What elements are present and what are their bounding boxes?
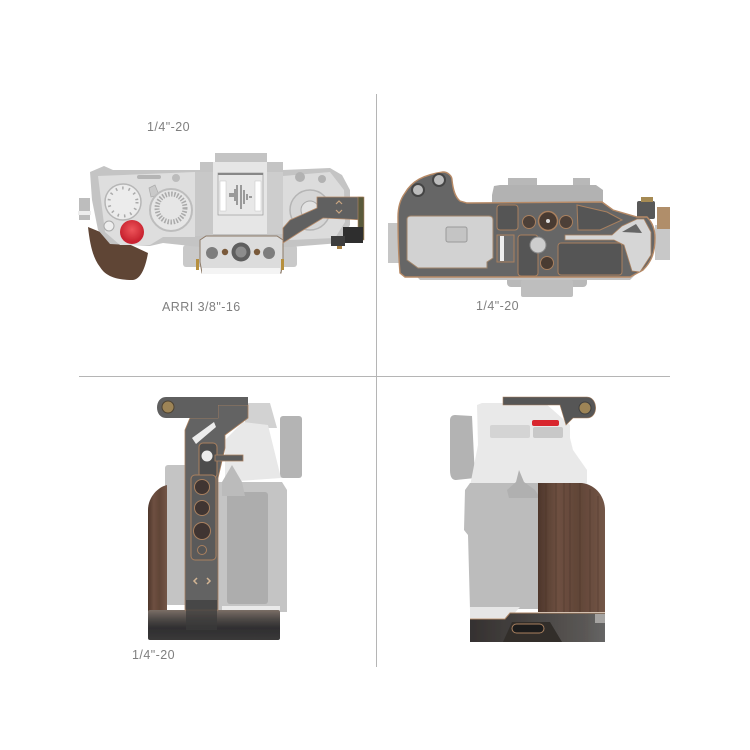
viewfinder eyecup xyxy=(450,415,475,480)
dials xyxy=(104,172,330,231)
red shutter button xyxy=(120,220,144,244)
panel: bottom view of cage xyxy=(388,172,670,297)
wood grip xyxy=(538,483,605,612)
camera top xyxy=(470,403,587,486)
light band xyxy=(470,607,520,618)
cage front plate xyxy=(196,236,284,274)
battery door xyxy=(407,216,493,268)
top arm xyxy=(503,397,596,425)
camera grey body xyxy=(464,483,540,609)
panel: left side view xyxy=(148,397,302,640)
door latch xyxy=(446,227,467,242)
panel: top view of camera cage xyxy=(78,153,364,280)
top dials xyxy=(490,425,530,438)
hot shoe xyxy=(218,173,263,215)
wood grip xyxy=(88,227,148,280)
cage arm xyxy=(283,197,364,249)
base xyxy=(148,610,280,640)
label: side 1/4"-20: 1/4"-20 xyxy=(132,648,175,662)
label: ARRI 3/8"-16: ARRI 3/8"-16 xyxy=(162,300,241,314)
lens and camera behind xyxy=(388,178,670,297)
cutout inside key xyxy=(622,224,642,233)
label: top 1/4"-20: 1/4"-20 xyxy=(147,120,190,134)
red release xyxy=(532,420,559,426)
cutouts xyxy=(497,205,622,276)
shutter dial xyxy=(533,427,563,438)
mounting holes xyxy=(412,174,572,270)
camera body top xyxy=(78,153,350,267)
wood grip side xyxy=(148,485,167,612)
cage upright xyxy=(157,397,248,630)
vertical divider xyxy=(376,94,377,667)
cage plate xyxy=(398,172,655,277)
white bar in cutout xyxy=(500,236,504,261)
horizontal divider xyxy=(79,376,670,377)
base xyxy=(470,613,605,642)
panel: right side view xyxy=(450,397,605,642)
camera body xyxy=(165,403,302,612)
label: bottom 1/4"-20: 1/4"-20 xyxy=(476,299,519,313)
strap lug xyxy=(507,470,540,498)
silver key tool xyxy=(565,219,651,272)
